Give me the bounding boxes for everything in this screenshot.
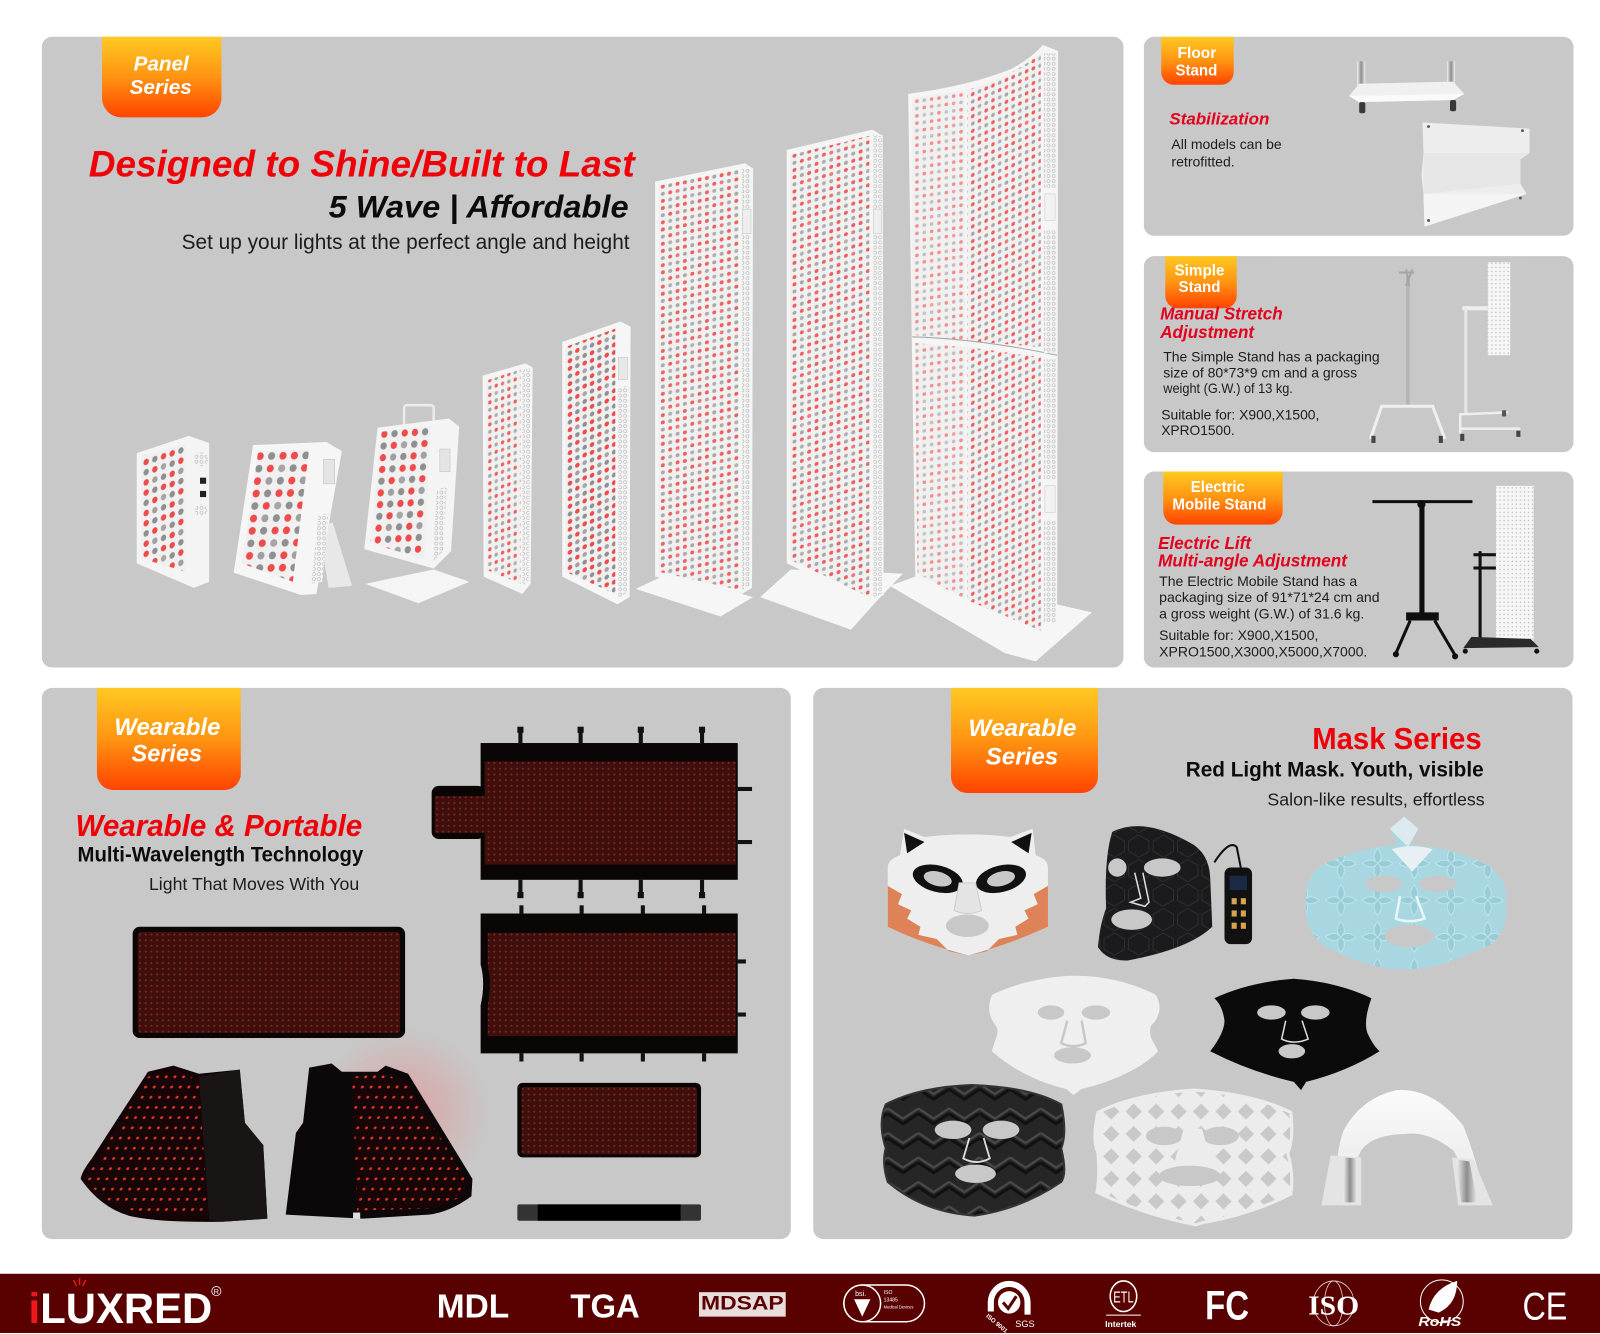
heading: Manual Stretch Adjustment: Manual Stretch (1160, 303, 1283, 323)
product: black LED mask with remote (1098, 826, 1252, 961)
product: floor stand plate (1421, 122, 1530, 227)
cert: BSI ISO 13485: 13485 (884, 1297, 898, 1303)
cert: TGA: TGA (570, 1289, 640, 1326)
cert: RoHS (1418, 1280, 1463, 1329)
product: curved double floor panel 8 (890, 45, 1092, 661)
cert: BSI ISO 13485 (844, 1285, 924, 1322)
cert: MDSAP: MDSAP (701, 1293, 784, 1315)
heading: Wearable & Portable: Wearable & Portable (76, 809, 362, 843)
text: electric stand description: a gross weight (G.W.) of 31.6 kg. (1159, 607, 1364, 622)
cert: CE: CE (1522, 1286, 1567, 1329)
cert: SGS: SGS (1015, 1319, 1035, 1329)
text: all models: All models can be (1171, 137, 1282, 152)
cert: ETL Intertek: Intertek (1105, 1319, 1137, 1329)
subheading: 5 Wave: 5 Wave | Affordable (329, 188, 629, 224)
product: simple stand bare (1370, 269, 1445, 443)
text: electric stand description: The Electric Mobile Stand has a (1159, 574, 1357, 589)
badge: Wearable Series: Series (132, 740, 202, 767)
product: electric stand with panel (1463, 486, 1539, 654)
text: light that moves: Light That Moves With You (149, 874, 359, 894)
badge: Floor Stand: Floor (1178, 45, 1216, 62)
panel: Floor Stand (1144, 37, 1573, 236)
product: wrap mat notched (481, 905, 746, 1061)
cert: BSI ISO 13485: ISO (884, 1290, 892, 1296)
cert: ISO: ISO (1308, 1290, 1359, 1321)
panel: Simple Stand (1144, 256, 1573, 452)
cert: ISO (1308, 1281, 1359, 1326)
badge: Simple Stand: Stand (1179, 279, 1220, 296)
product: LED vest right (286, 1029, 490, 1219)
badge: Wearable Series mask (951, 688, 1098, 793)
product: electric stand black (1372, 500, 1472, 659)
product: simple stand with panel (1460, 262, 1520, 441)
badge: Simple Stand: Simple (1174, 263, 1224, 280)
badge: Electric Mobile Stand: Mobile Stand (1172, 496, 1266, 513)
cert: BSI ISO 13485: Medical Devices (884, 1304, 913, 1309)
badge: Floor Stand (1161, 37, 1234, 85)
product: tall panel 5 (562, 322, 631, 604)
text: electric stand description: Suitable for: X900,X1500, (1159, 628, 1318, 643)
heading: Manual Stretch Adjustment (1159, 303, 1283, 342)
badge: Panel Series: Panel (134, 53, 190, 75)
badge: Floor Stand: Stand (1176, 63, 1217, 80)
product: floor panel 6 (636, 163, 753, 616)
badge: Wearable Series (97, 688, 241, 790)
text: salon-like results: Salon-like results, effortless (1267, 789, 1485, 809)
footer bar (0, 1274, 1600, 1334)
product: lattice white mask (1095, 1090, 1292, 1225)
cert: RoHS: RoHS (1418, 1314, 1461, 1329)
badge: Simple Stand (1165, 256, 1237, 308)
panel: Mask Series (813, 688, 1572, 1239)
text: simple stand description: The Simple Stand has a packaging (1163, 349, 1380, 364)
cert: ETL Intertek (1105, 1281, 1141, 1329)
product: panel 2 with kickstand (234, 442, 352, 595)
subheading: Multi-Wavelength: Multi-Wavelength Technology (78, 842, 363, 866)
heading: Electric Lift (1158, 533, 1348, 570)
product: small mat (517, 1083, 701, 1157)
product: wrap mat with tab (432, 727, 752, 898)
product: small panel 1 (137, 436, 209, 588)
product: panel 3 with base and handle (364, 405, 469, 603)
text: all models: retrofitted. (1171, 154, 1235, 169)
badge: Wearable Series mask: Series (986, 743, 1058, 770)
heading: Manual Stretch Adjustment: Adjustment (1159, 322, 1255, 342)
text: simple stand description: weight (G.W.) of 13 kg. (1162, 381, 1293, 396)
text: electric stand description: packaging size of 91*71*24 cm and (1159, 590, 1380, 605)
text: electric stand description (1159, 574, 1380, 659)
product: floor stand frame (1349, 61, 1464, 113)
heading: Mask Series: Mask Series (1312, 722, 1482, 756)
panel: Panel Series (42, 37, 1123, 668)
cert: ETL Intertek: ETL (1113, 1289, 1134, 1306)
badge: Wearable Series: Wearable (114, 714, 220, 741)
product: cat mask (888, 829, 1048, 955)
badge: Electric Mobile Stand (1163, 472, 1283, 525)
product: floor panel 7 (760, 130, 903, 630)
text: simple stand description: size of 80*73*9 cm and a gross (1163, 366, 1357, 381)
text: set up your lights: Set up your lights at the perfect angle and height (182, 231, 630, 254)
logo: iLUXRED: iLUXRED (29, 1285, 212, 1333)
product: rectangular mat (133, 927, 405, 1038)
product: black silicone mask (1210, 979, 1380, 1090)
text: simple stand description: XPRO1500. (1161, 423, 1235, 438)
product: blue gel mask (1306, 817, 1506, 970)
subheading: Red Light Mask: Red Light Mask. Youth, visible (1186, 758, 1484, 782)
product: tall panel 4 (483, 363, 533, 594)
cert: FC: FC (1205, 1283, 1249, 1329)
product: LED vest left (81, 1066, 267, 1222)
cert: MDL: MDL (437, 1289, 509, 1326)
heading: Electric Lift: Multi-angle Adjustment (1158, 550, 1348, 570)
product: belt strap (517, 1204, 701, 1221)
logo: iLUXRED: R (214, 1288, 219, 1296)
badge: Wearable Series mask: Wearable (968, 715, 1077, 742)
product: white silicone mask (989, 976, 1159, 1095)
text: simple stand description: Suitable for: X900,X1500, (1161, 407, 1319, 422)
product: quilted black mask (882, 1085, 1064, 1216)
text: simple stand description (1161, 349, 1380, 438)
text: all models (1171, 137, 1282, 169)
cert: SGS (984, 1284, 1035, 1334)
text: electric stand description: XPRO1500,X3000,X5000,X7000. (1159, 644, 1367, 659)
cert: BSI ISO 13485: bsi. (855, 1290, 866, 1298)
heading: Stabilization: Stabilization (1169, 110, 1269, 129)
panel: Wearable Series (42, 688, 791, 1239)
badge: Panel Series (102, 37, 221, 117)
badge: Electric Mobile Stand: Electric (1191, 479, 1245, 496)
heading: Designed to Shine: Designed to Shine/Built to Last (89, 144, 636, 185)
badge: Panel Series: Series (130, 77, 192, 99)
heading: Electric Lift: Electric Lift (1158, 533, 1252, 553)
panel: Electric Mobile Stand (1144, 472, 1573, 668)
product: neck arch device (1321, 1090, 1493, 1205)
